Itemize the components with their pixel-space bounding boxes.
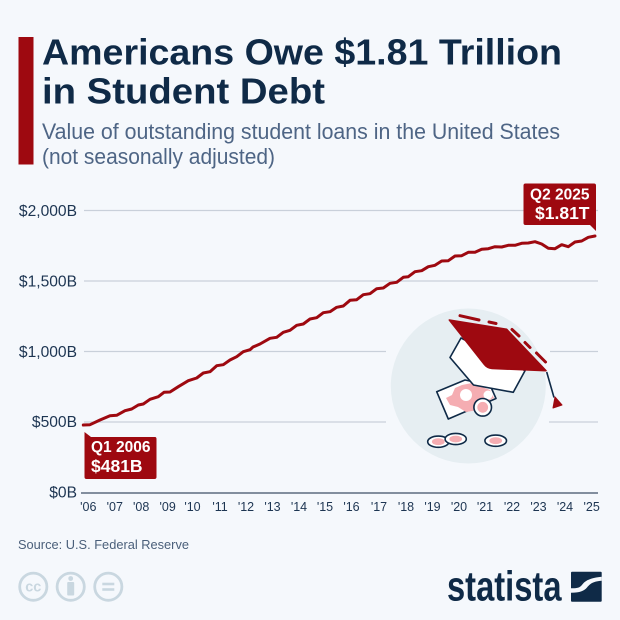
x axis labels: '15 — [317, 500, 333, 514]
coin on banknote — [474, 398, 492, 416]
title: Americans Owe $1.81 Trillion — [42, 32, 562, 72]
callout: Q2 2025: Q2 2025 — [530, 186, 590, 204]
x axis labels: '17 — [371, 500, 387, 514]
illustration: graduation cap with money — [391, 308, 562, 464]
x axis labels: '21 — [477, 500, 493, 514]
statista wordmark: statista — [447, 563, 562, 610]
icon: no derivatives — [95, 573, 122, 600]
license icons — [20, 573, 122, 600]
icon: statista logo — [571, 572, 602, 602]
title — [42, 32, 562, 112]
x axis labels: '19 — [424, 500, 441, 514]
x axis labels: '10 — [184, 500, 201, 514]
x axis labels: '08 — [133, 500, 149, 514]
x axis labels: '06 — [80, 500, 96, 514]
coins — [428, 433, 507, 447]
icon: cc: cc — [25, 580, 41, 596]
subtitle — [42, 119, 560, 169]
cap dashes — [460, 316, 546, 362]
data line — [83, 236, 595, 425]
y axis labels: $1,500B — [19, 274, 77, 290]
x axis labels: '14 — [291, 500, 307, 514]
x axis labels — [80, 500, 600, 514]
source: Source: U.S. Federal Reserve — [18, 538, 189, 552]
y axis labels — [19, 203, 77, 502]
callout: Q2 2025: $1.81T — [535, 203, 590, 223]
subtitle: Value of outstanding student loans in the United States — [42, 119, 560, 144]
x axis labels: '24 — [557, 500, 573, 514]
x axis labels: '11 — [212, 500, 228, 514]
y axis labels: $500B — [32, 414, 77, 431]
y axis labels: $1,000B — [19, 344, 77, 361]
tassel — [547, 372, 562, 408]
y axis labels: $0B — [49, 484, 77, 502]
x axis labels: '07 — [107, 500, 123, 514]
callout: Q2 2025 — [524, 184, 596, 231]
x axis labels: '16 — [343, 500, 360, 514]
title accent bar — [18, 37, 34, 164]
x axis labels: '09 — [160, 500, 176, 514]
x axis labels: '23 — [530, 500, 547, 514]
callout: Q1 2006: Q1 2006 — [91, 439, 151, 456]
callout: Q1 2006: $481B — [91, 456, 143, 476]
cap base — [450, 338, 525, 392]
x axis labels: '13 — [264, 500, 281, 514]
x axis labels: '25 — [584, 500, 600, 514]
x axis labels: '20 — [451, 500, 467, 514]
callout: Q1 2006 — [84, 432, 156, 479]
title: in Student Debt — [42, 70, 325, 112]
icon: attribution — [57, 573, 84, 600]
banknote — [437, 380, 496, 419]
subtitle: (not seasonally adjusted) — [42, 144, 275, 169]
x axis labels: '18 — [398, 500, 414, 514]
cap top — [449, 320, 546, 371]
x axis labels: '22 — [504, 500, 520, 514]
x axis labels: '12 — [238, 500, 254, 514]
y axis labels: $2,000B — [19, 203, 77, 220]
